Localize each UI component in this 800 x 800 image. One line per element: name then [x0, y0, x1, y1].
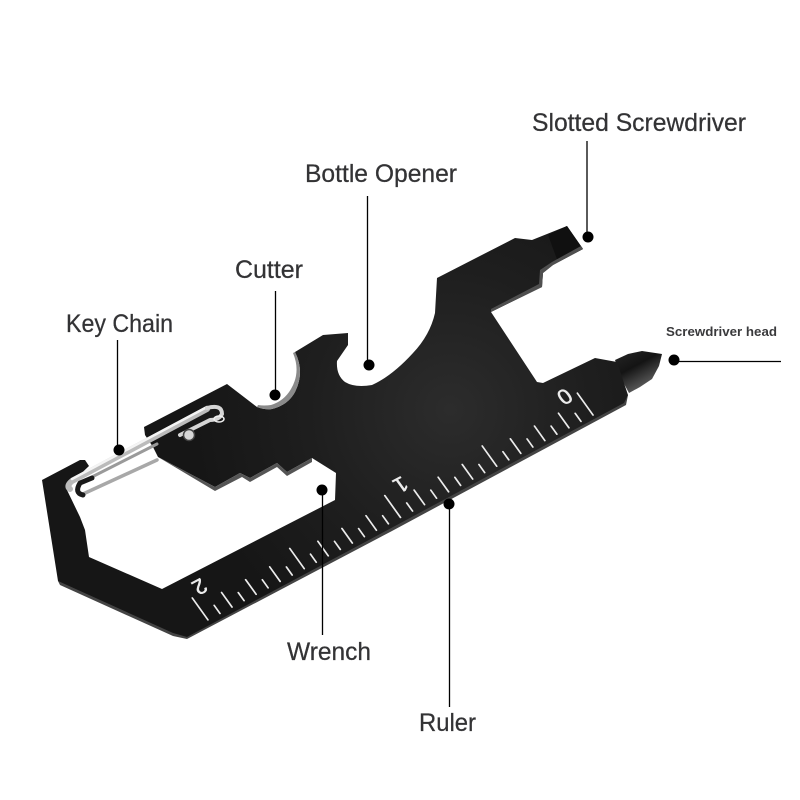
label: Bottle Opener: Bottle Opener [305, 160, 457, 188]
label: Key Chain [66, 310, 173, 456]
label: Slotted Screwdriver [532, 109, 746, 242]
ruler number 0: 0 [552, 384, 577, 410]
label: Bottle Opener [305, 160, 457, 370]
label: Slotted Screwdriver: Slotted Screwdriver [532, 109, 746, 137]
label: Ruler: Ruler [419, 709, 476, 737]
label: Ruler [419, 498, 476, 737]
label: Wrench: Wrench [287, 638, 371, 666]
ruler number 1: 1 [388, 472, 413, 498]
tool silhouette [42, 226, 628, 637]
wrench edge [158, 457, 312, 491]
slotted screwdriver tip [548, 226, 583, 262]
multi-tool body [42, 226, 662, 639]
key chain carabiner [68, 407, 224, 495]
fork edge highlight [491, 246, 583, 312]
ruler ticks [192, 393, 593, 620]
tool edge thickness [58, 395, 628, 639]
label: Cutter [235, 256, 303, 400]
cutter edge highlight [257, 352, 300, 409]
label: Wrench [287, 484, 371, 666]
label: Screwdriver head [666, 325, 781, 366]
screwdriver head [615, 351, 662, 393]
label: Cutter: Cutter [235, 256, 303, 284]
label: Screwdriver head: Screwdriver head [666, 325, 777, 339]
label: Key Chain: Key Chain [66, 310, 173, 338]
ruler number 2: 2 [187, 574, 212, 600]
